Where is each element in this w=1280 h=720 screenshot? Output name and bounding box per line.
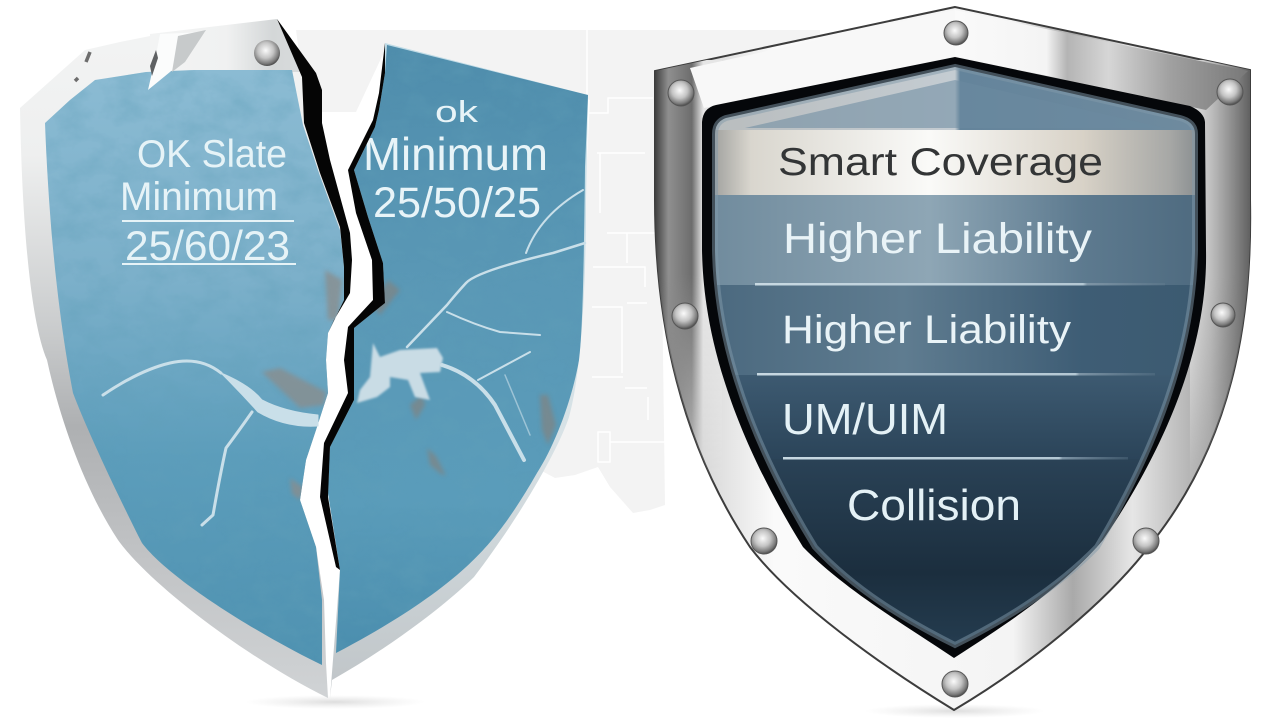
rust stains xyxy=(372,280,556,476)
text: OK State Minimum xyxy=(120,133,296,269)
rust stains xyxy=(262,270,342,500)
text: OK State Minimum: OK Slate xyxy=(137,133,287,176)
rivet on fragment xyxy=(254,40,280,66)
torn metal fold xyxy=(148,32,205,90)
text: ok Minimum: ok xyxy=(435,94,479,129)
strong shield: smart coverage xyxy=(655,7,1252,710)
black inner border xyxy=(702,57,1206,658)
black crack edge on left fragment xyxy=(277,19,352,333)
right shield fragment xyxy=(325,40,590,698)
label: Collision: Collision xyxy=(847,481,1021,530)
left shield fragment xyxy=(20,19,350,698)
label: Higher Liability second: Higher Liability xyxy=(782,308,1071,352)
impact blotch xyxy=(357,343,443,403)
heading: Smart Coverage: Smart Coverage xyxy=(778,141,1103,184)
fracture lines on right fragment xyxy=(407,190,585,460)
torn metal specks xyxy=(75,52,90,81)
broken shield: cracked state-minimum shield xyxy=(20,19,590,698)
frame side shading xyxy=(655,60,1252,500)
top-left frame highlight xyxy=(690,10,955,108)
text: ok Minimum: Minimum xyxy=(363,128,548,180)
shadow: under broken shield xyxy=(245,695,425,709)
shadow: under strong shield xyxy=(865,704,1045,718)
text: OK State Minimum: Minimum xyxy=(120,175,278,219)
top-right frame sheen xyxy=(955,10,1248,110)
text: ok Minimum xyxy=(363,94,548,227)
band separator lines xyxy=(755,283,1165,286)
glass panel with coverage bands xyxy=(700,60,1210,649)
cap highlight xyxy=(745,80,1165,128)
black crack edge on right fragment xyxy=(320,43,385,570)
rivets around frame xyxy=(668,21,1243,697)
label: UM/UIM: UM/UIM xyxy=(782,395,948,444)
text: ok Minimum: 25/50/25 xyxy=(373,179,541,227)
text: OK State Minimum: 25/60/23 xyxy=(125,222,290,269)
background: faint Oklahoma county map xyxy=(296,30,820,513)
metal frame xyxy=(655,7,1252,710)
fracture lines on left fragment xyxy=(103,361,318,525)
label: Higher Liability: Higher Liability xyxy=(783,215,1093,263)
